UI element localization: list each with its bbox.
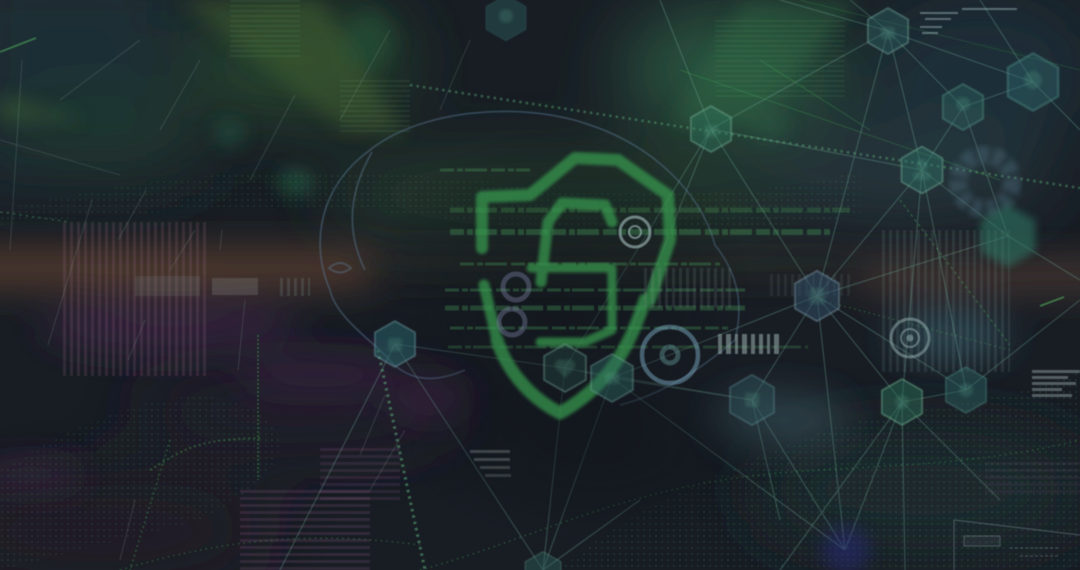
- node: beside heart: [591, 354, 633, 402]
- network nodes: [375, 0, 1058, 570]
- node: right glow: [981, 205, 1035, 267]
- readout: bottom right panel: [954, 520, 1080, 570]
- green accent lines: [0, 0, 1080, 350]
- dotted terrain mesh: [0, 170, 1080, 570]
- node glyphs: [388, 9, 1042, 409]
- node: centre right: [795, 271, 839, 321]
- node: left: [375, 321, 415, 367]
- node: bottom centre: [525, 552, 561, 570]
- extras around centre: [470, 268, 735, 477]
- node: right middle: [901, 146, 943, 194]
- network connection lines: [280, 0, 1080, 570]
- data readouts: [920, 8, 1080, 570]
- icon: gear: [958, 155, 1012, 209]
- human head outline: [320, 111, 739, 405]
- rain streak lines: [0, 30, 470, 560]
- icon: eye: [329, 263, 351, 272]
- central dark shadow: [370, 130, 790, 540]
- node: top centre left: [486, 0, 526, 41]
- node: upper centre: [691, 106, 731, 152]
- node: lower far right: [946, 367, 986, 413]
- node: far top right: [1008, 53, 1058, 111]
- node: lower right: [882, 379, 922, 425]
- icon: green security shield: [482, 158, 670, 413]
- icon: target rings: [499, 217, 929, 383]
- code text strips: [440, 170, 850, 347]
- readout: right code block: [1032, 370, 1080, 397]
- node: heart: [544, 344, 586, 392]
- node: lower middle: [730, 375, 774, 425]
- node: top right: [868, 8, 908, 54]
- purple node glow: [822, 526, 870, 570]
- icon: bar meter: [718, 334, 779, 354]
- readout: top right code: [920, 8, 1017, 34]
- node: right upper: [943, 84, 983, 130]
